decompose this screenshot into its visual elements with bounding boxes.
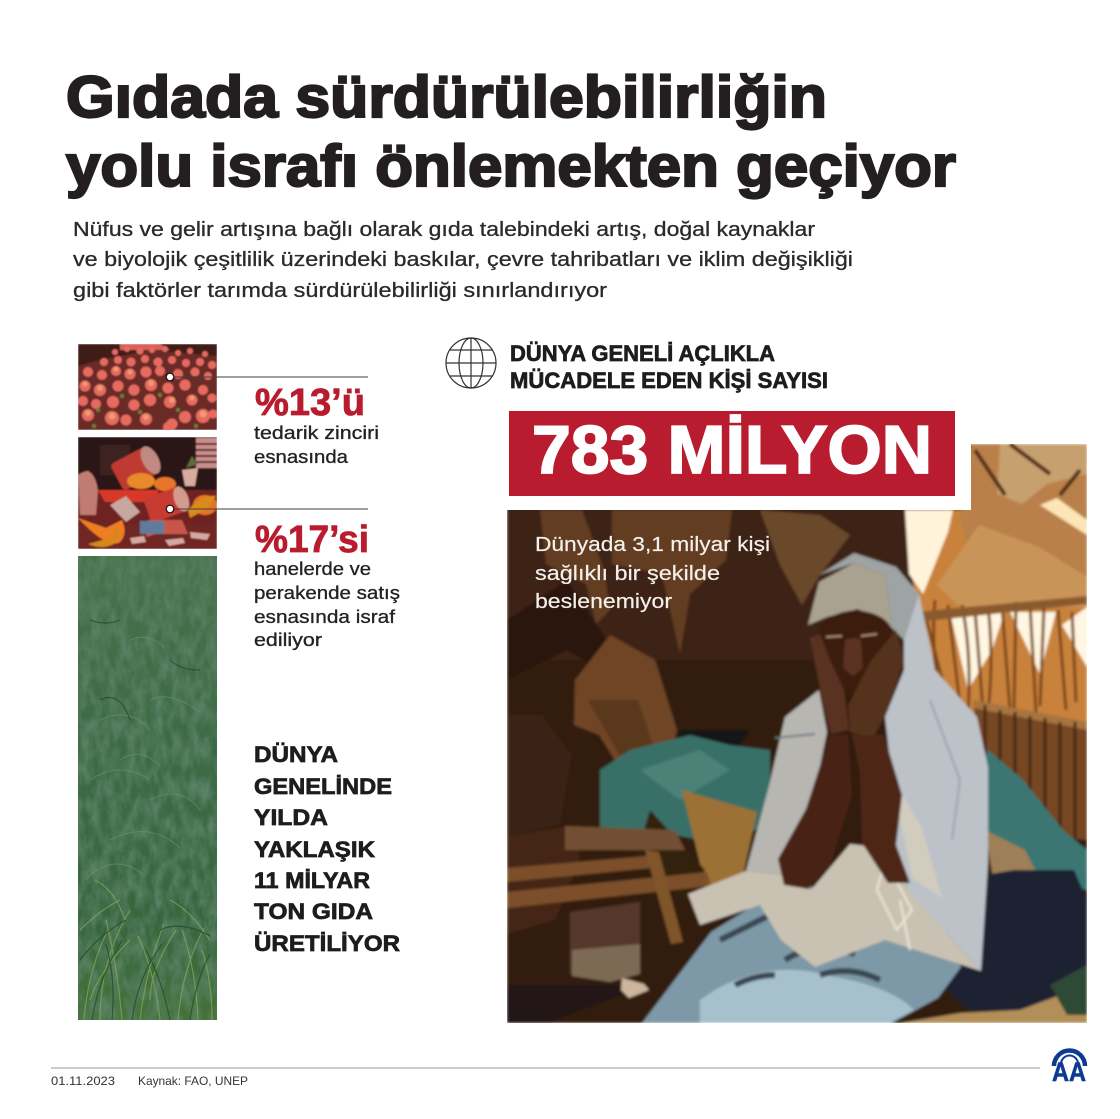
stat: world food production: 11 MİLYAR (254, 868, 370, 893)
sack (574, 635, 677, 775)
photo caption: beslenemiyor (535, 590, 672, 613)
photo caption: Dünyada 3,1 milyar kişi (535, 533, 770, 556)
intro text block: ve biyolojik çeşitlilik üzerindeki baskılar, çevre tahribatları ve iklim değişikliği (73, 249, 853, 271)
banner: 783 million: 783 MİLYON (532, 412, 932, 488)
intro text block: Nüfus ve gelir artışına bağlı olarak gıda talebindeki artış, doğal kaynaklar (73, 219, 815, 241)
icon: globe (446, 338, 496, 388)
footer rule (51, 1067, 1040, 1069)
stat: world food production: GENELİNDE (254, 774, 392, 799)
logo: Anadolu Agency: AA (1052, 1057, 1086, 1087)
stat: world food production (254, 742, 400, 956)
title: yolu israfı önlemekten geçiyor (66, 134, 956, 199)
heading: people facing hunger (510, 341, 828, 393)
image: wheat field (78, 556, 217, 1020)
stat: world food production: DÜNYA (254, 742, 338, 767)
heading: people facing hunger: MÜCADELE EDEN KİŞİ SAYISI (510, 368, 828, 393)
stat: 17 percent (254, 519, 400, 650)
stat: 17 percent: %17’si (255, 519, 369, 561)
stat: world food production: YAKLAŞIK (254, 837, 375, 862)
stat: 17 percent: esnasında israf (254, 607, 396, 627)
image: fallen apples (78, 344, 218, 432)
right teal cloth (976, 750, 1087, 890)
arms (778, 735, 852, 889)
callout line: households (166, 505, 368, 513)
heading: people facing hunger: DÜNYA GENELİ AÇLIKLA (510, 341, 775, 366)
footer date and source: Kaynak: FAO, UNEP (138, 1074, 248, 1088)
left hand (810, 634, 849, 734)
photo caption (535, 533, 770, 613)
dark cloth (946, 868, 1087, 1012)
title (66, 65, 956, 199)
callout line: supply chain (166, 373, 368, 381)
stat: world food production: TON GIDA (254, 899, 373, 924)
basket (680, 789, 758, 886)
stat: 17 percent: perakende satış (254, 583, 400, 603)
stat: 17 percent: hanelerde ve (254, 559, 371, 579)
tin can (570, 902, 640, 982)
stat: 13 percent: esnasında (254, 447, 349, 467)
bench (565, 826, 685, 850)
face (819, 610, 892, 694)
right shawl (882, 593, 990, 972)
teal cloth (600, 735, 770, 840)
fence (973, 700, 1087, 840)
lower shawl (688, 844, 981, 971)
image: household food waste (78, 437, 217, 549)
title: Gıdada sürdürülebilirliğin (66, 65, 827, 130)
intro text block (73, 219, 853, 302)
footer date and source (51, 1074, 248, 1088)
stat: 13 percent: tedarik zinciri (254, 423, 379, 443)
stat: 17 percent: ediliyor (254, 630, 322, 650)
stat: 13 percent (254, 382, 379, 467)
photo caption: sağlıklı bir şekilde (535, 562, 720, 585)
left shawl (746, 690, 827, 875)
bright tent opening (905, 510, 1087, 735)
head scarf (819, 553, 919, 640)
intro text block: gibi faktörler tarımda sürdürülebilirliği sınırlandırıyor (73, 280, 607, 302)
stat: world food production: ÜRETİLİYOR (254, 931, 400, 956)
skirt (642, 886, 961, 1023)
stat: 13 percent: %13’ü (255, 382, 365, 424)
right hand (848, 630, 904, 740)
footer date and source: 01.11.2023 (51, 1074, 115, 1088)
stat: world food production: YILDA (254, 805, 328, 830)
photo: woman in a tent (507, 444, 1087, 1023)
